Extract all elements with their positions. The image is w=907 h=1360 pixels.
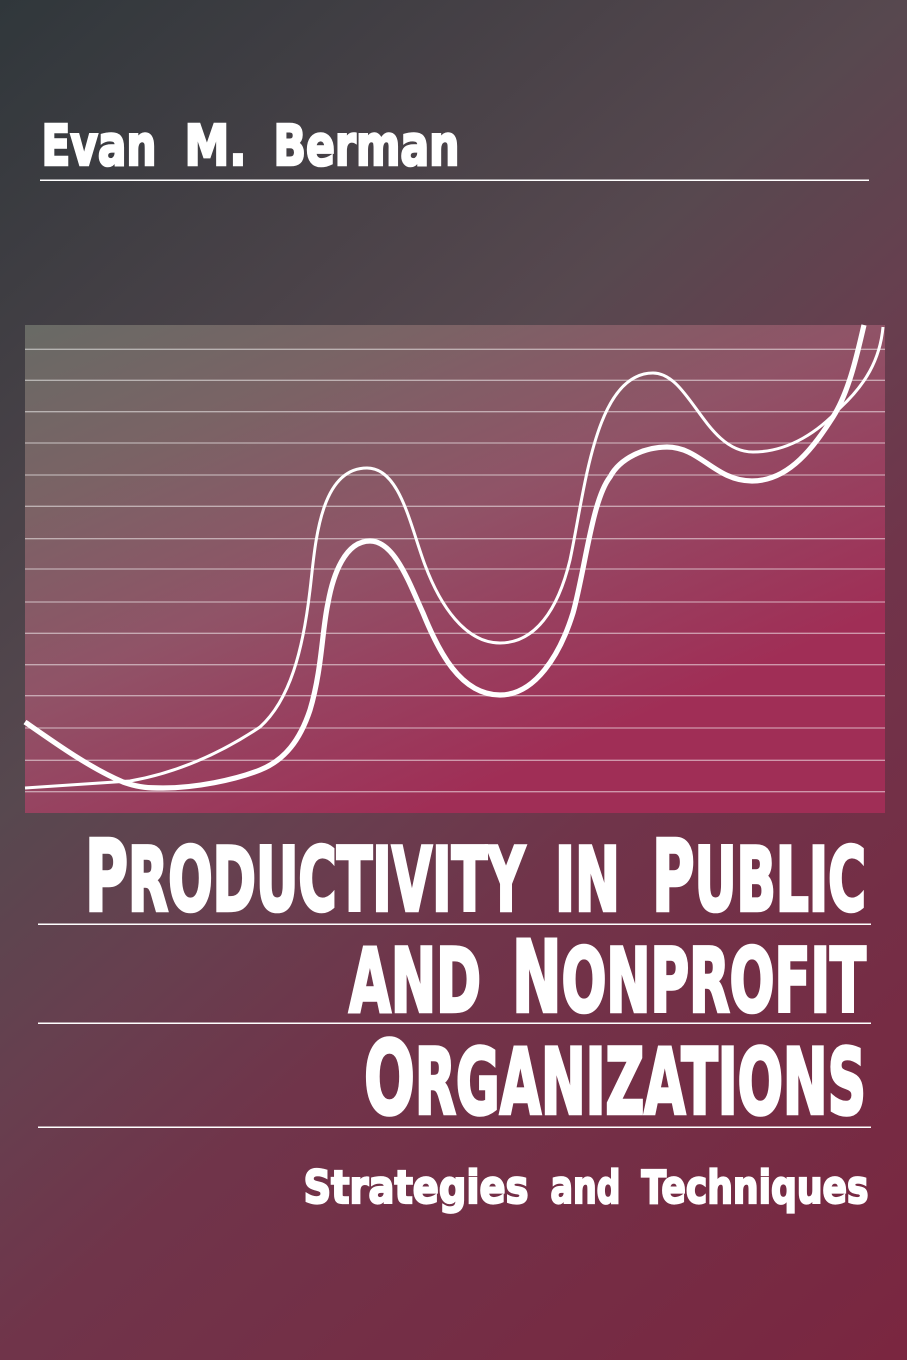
rule 3 (38, 1126, 871, 1128)
author name: Evan (42, 114, 156, 179)
chart grid lines (25, 349, 885, 792)
author rule (40, 180, 869, 181)
rule 1 (38, 924, 871, 925)
thin curve (25, 327, 883, 788)
rule 2 (38, 1022, 871, 1024)
title line 1: IN (555, 828, 620, 932)
subtitle: Strategies (304, 1161, 528, 1214)
title line 2: AND (349, 930, 481, 1032)
title line 1: PRODUCTIVITY (85, 820, 526, 934)
title line 2 (349, 920, 866, 1036)
subtitle (304, 1161, 868, 1214)
author name: M. (184, 114, 246, 179)
author name: Berman (274, 114, 460, 179)
chart background (25, 325, 885, 813)
subtitle: and (550, 1161, 620, 1214)
author name (42, 114, 460, 179)
panel: line chart (25, 325, 885, 813)
thick curve (25, 325, 864, 788)
